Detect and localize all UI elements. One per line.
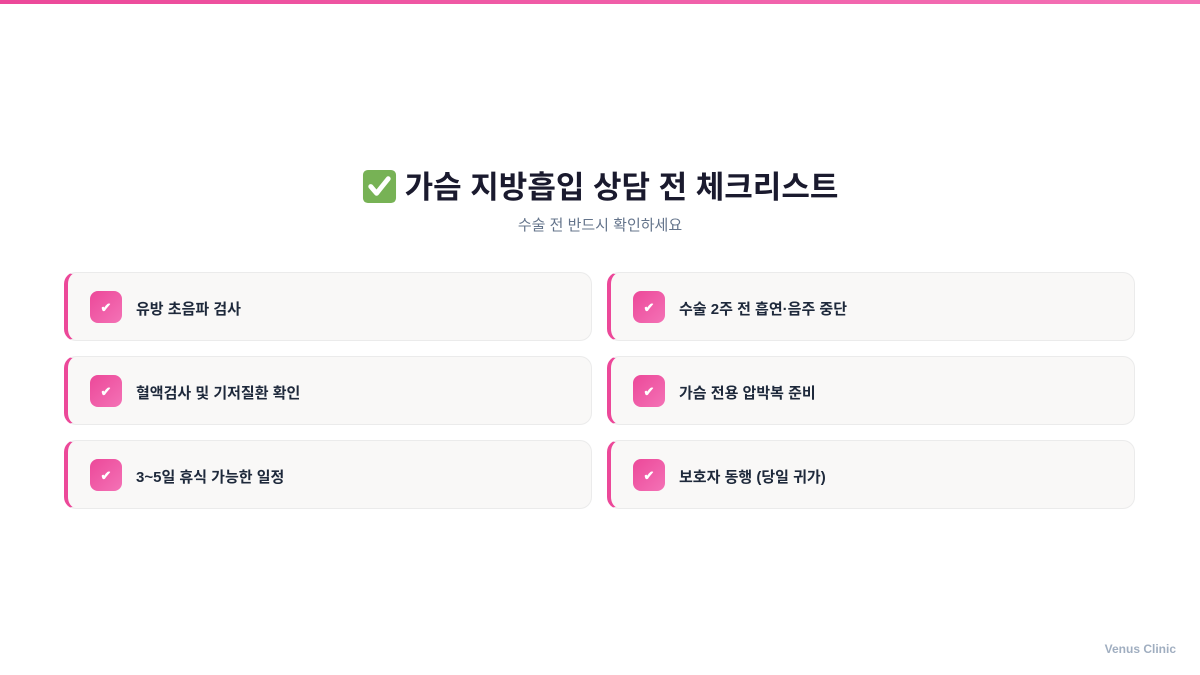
card: 5 [64, 440, 592, 509]
card: 3: 혈액검사 및 기저질환 확인 [136, 385, 300, 402]
card: 3: ✔ [101, 384, 111, 399]
card: 6: ✔ [644, 468, 654, 483]
card: 4 [607, 356, 1135, 425]
card: 6: 보호자 동행 (당일 귀가) [679, 469, 826, 486]
card: 3 [64, 356, 592, 425]
card: 4: ✔ [644, 384, 654, 399]
footer brand: Venus Clinic [1105, 642, 1176, 656]
card: 2 [607, 272, 1135, 341]
card: 2: ✔ [644, 300, 654, 315]
card: 5: 3~5일 휴식 가능한 일정 [136, 469, 284, 486]
card: 1: 유방 초음파 검사 [136, 301, 241, 318]
card: 1 [64, 272, 592, 341]
card: 6 [607, 440, 1135, 509]
subtitle: 수술 전 반드시 확인하세요 [518, 217, 682, 234]
title: 가슴 지방흡입 상담 전 체크리스트 [405, 170, 838, 205]
card: 2: 수술 2주 전 흡연·음주 중단 [679, 301, 847, 318]
card: 1: ✔ [101, 300, 111, 315]
card: 5: ✔ [101, 468, 111, 483]
card: 4: 가슴 전용 압박복 준비 [679, 385, 816, 402]
